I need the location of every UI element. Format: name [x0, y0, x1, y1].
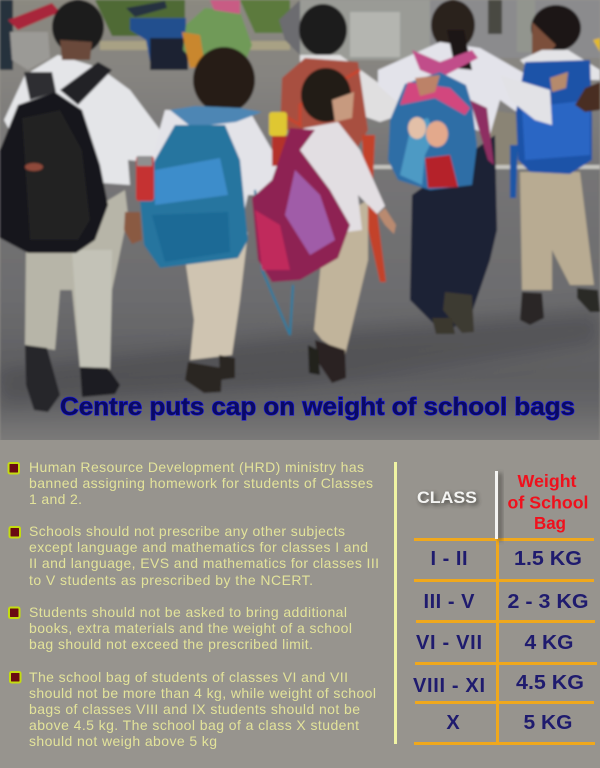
bullet item 1: Human Resource Development (HRD) ministry has — [29, 459, 364, 475]
background: shrubs, scooter, bystanders and fence — [0, 0, 600, 169]
bullet item 3: Students should not be asked to bring additional — [29, 604, 347, 620]
bullet item 2: Schools should not prescribe any other subjects — [29, 523, 345, 539]
table rules — [414, 538, 597, 745]
row: III - V — [424, 591, 588, 613]
row: I - II: 1.5 KG — [514, 548, 582, 570]
bullet item 1: banned assigning homework for students of Classes — [29, 475, 373, 491]
bullet item 2 — [10, 523, 379, 588]
bullet item 3 — [9, 604, 352, 652]
bullet item 4: should not be more than 4 kg, while weight of school — [29, 685, 376, 701]
figure: boy with black backpack — [0, 0, 208, 412]
bullet item 3: books, extra materials and the weight of a school — [29, 620, 352, 636]
bullet list — [8, 459, 379, 749]
header: weight of school bag: Bag — [534, 513, 566, 533]
figure: small girl with pink backpack — [252, 68, 396, 383]
row: VI - VII: 4 KG — [524, 632, 574, 654]
header: class: CLASS — [419, 490, 479, 509]
header divider — [495, 471, 502, 541]
vertical separator — [394, 462, 397, 744]
bullet item 2: II and language, EVS and mathematics for classes III — [29, 555, 379, 571]
bullet item 4: should not weigh above 5 kg — [29, 733, 217, 749]
header: weight of school bag: Weight — [518, 471, 577, 491]
road background — [0, 0, 600, 442]
figure: boy with red pack behind — [269, 4, 440, 282]
row: VIII - XI — [413, 672, 584, 697]
row: X: X — [446, 712, 460, 734]
bullet item 4: bags of classes VIII and IX students should not be — [29, 701, 360, 717]
figure: girl with blue backpack — [136, 47, 293, 393]
header: weight of school bag — [508, 471, 588, 533]
row: VIII - XI: 4.5 KG — [516, 672, 584, 694]
bullet item 2: to V students as prescribed by the NCERT. — [29, 572, 313, 588]
figure: girl with Frozen backpack — [378, 0, 552, 334]
header: weight of school bag: of School — [508, 492, 588, 512]
panel: photo of children walking with school bags — [0, 0, 600, 442]
row: X: 5 KG — [524, 712, 572, 734]
row: III - V: III - V — [424, 591, 475, 613]
figure: boy with blue hexagon backpack — [500, 5, 600, 325]
header: class: CLASS — [417, 488, 477, 507]
row: VI - VII — [416, 632, 574, 654]
bullet item 4: The school bag of students of classes VI and VII — [29, 669, 348, 685]
bullet item 2: except language and mathematics for classes I and — [29, 539, 368, 555]
row: III - V: 2 - 3 KG — [508, 591, 588, 613]
panel: information background — [0, 440, 600, 768]
row: I - II: I - II — [430, 548, 468, 570]
row: VIII - XI: VIII - XI — [413, 675, 485, 697]
row: I - II — [430, 548, 582, 570]
bullet item 4 — [10, 669, 376, 749]
bullet item 1 — [8, 459, 373, 507]
table: class and weight of school bag — [413, 471, 597, 745]
bullet item 3: bag should not exceed the prescribed limit. — [29, 636, 313, 652]
row: VI - VII: VI - VII — [416, 632, 482, 654]
ground shadows — [0, 310, 600, 405]
bullet item 4: above 4.5 kg. The school bag of a class X student — [29, 717, 359, 733]
bullet item 1: 1 and 2. — [29, 491, 82, 507]
row: X — [446, 712, 572, 734]
title: Centre puts cap on weight of school bags — [60, 393, 575, 421]
